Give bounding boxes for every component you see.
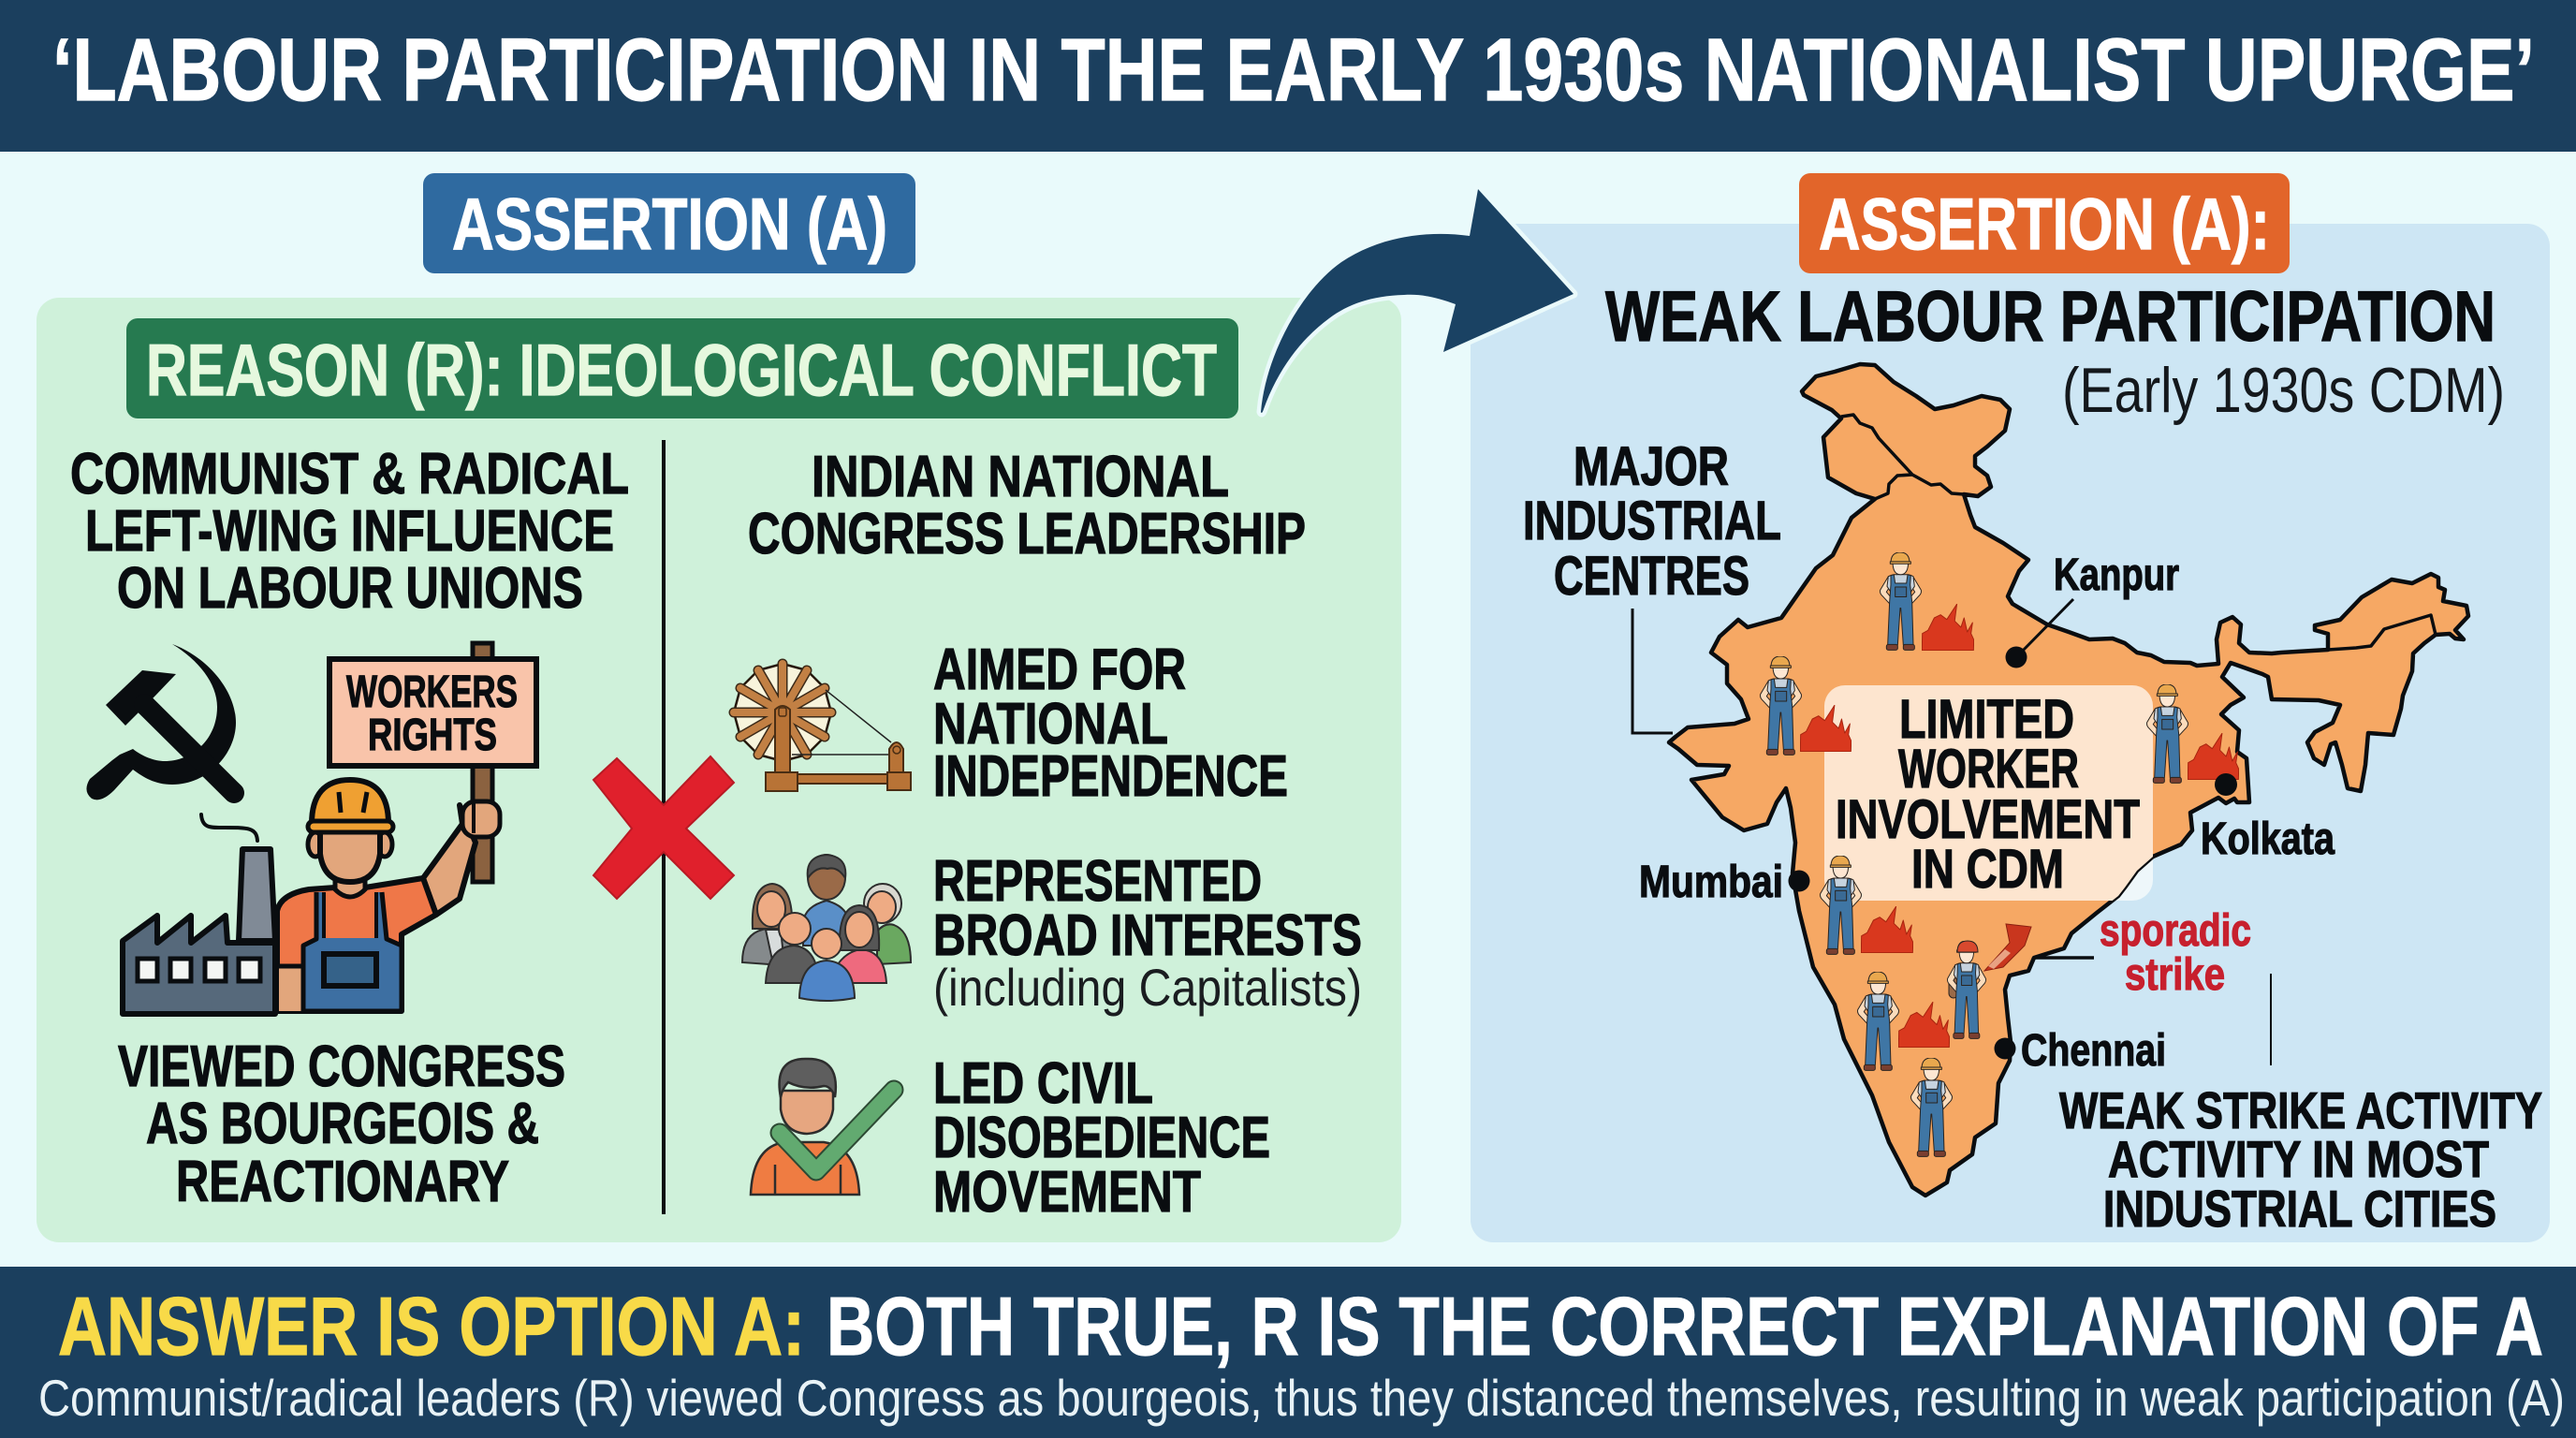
- city: Kolkata: [2201, 773, 2334, 864]
- callout box: limited worker involvement: IN CDM: [1911, 839, 2064, 900]
- text: aimed for national independence: AIMED FOR: [933, 638, 1186, 702]
- text: led civil disobedience: LED CIVIL: [933, 1051, 1153, 1116]
- text: viewed congress: AS BOURGEOIS &: [146, 1092, 539, 1156]
- text: led civil disobedience: MOVEMENT: [933, 1160, 1201, 1225]
- striking worker with flag: [1947, 924, 2031, 1038]
- text: communist influence heading: LEFT-WING INFLUENCE: [85, 499, 614, 564]
- callout glow outside coast: [1824, 685, 2153, 901]
- label: major industrial centres: CENTRES: [1554, 546, 1749, 607]
- callout box: limited worker involvement: INVOLVEMENT: [1836, 789, 2140, 850]
- badge: assertion left: [423, 173, 915, 273]
- text: aimed for national independence: NATIONAL: [933, 692, 1168, 756]
- callout box: limited worker involvement: [1824, 685, 2153, 901]
- text: represented broad interests: REPRESENTED: [933, 849, 1262, 914]
- icon: hammer and sickle: [86, 644, 236, 800]
- callout box: limited worker involvement: WORKER: [1898, 739, 2079, 800]
- icon: leader with check mark: [751, 1059, 894, 1195]
- text: viewed congress: VIEWED CONGRESS: [118, 1034, 565, 1099]
- footer banner: answer: ANSWER IS OPTION A:: [58, 1280, 805, 1372]
- badge: assertion right: ASSERTION (A):: [1819, 183, 2270, 265]
- icon: worker with sign: [277, 643, 500, 1011]
- sign: workers rights: RIGHTS: [368, 711, 497, 760]
- text: communist influence heading: COMMUNIST & RADICAL: [70, 442, 629, 506]
- badge: assertion left: ASSERTION (A): [452, 183, 887, 265]
- sign: workers rights: WORKERS: [346, 668, 518, 717]
- sign: workers rights: [329, 659, 536, 766]
- workers and flames on map: [1761, 552, 2239, 1156]
- map of India: [1669, 364, 2468, 1196]
- text: led civil disobedience: [933, 1051, 1270, 1225]
- connector: weak strike: [2270, 974, 2272, 1065]
- heading: weak labour participation: [1605, 277, 2505, 426]
- label: weak strike activity: [2059, 1081, 2542, 1238]
- icon: charkha spinning wheel: [734, 664, 911, 791]
- label: major industrial centres: INDUSTRIAL: [1523, 491, 1781, 551]
- text: aimed for national independence: INDEPENDENCE: [933, 744, 1288, 809]
- panel: reason (green): [37, 298, 1401, 1242]
- text: represented broad interests: (including Capitalists): [933, 958, 1362, 1017]
- label: sporadic strike: sporadic: [2100, 906, 2251, 956]
- city: Kolkata: Kolkata: [2201, 814, 2334, 864]
- text: communist influence heading: [70, 442, 629, 621]
- text: congress heading: CONGRESS LEADERSHIP: [748, 502, 1306, 566]
- text: aimed for national independence: [933, 638, 1288, 809]
- panel: assertion map (blue): [1471, 224, 2550, 1242]
- icon: red cross: [593, 756, 734, 899]
- title banner: [0, 0, 2576, 152]
- text: viewed congress: REACTIONARY: [176, 1150, 509, 1214]
- icon: factory: [123, 814, 275, 1014]
- label: sporadic strike: strike: [2125, 950, 2225, 1000]
- text: viewed congress: [118, 1034, 565, 1214]
- city: Kanpur: Kanpur: [2054, 550, 2179, 600]
- footer banner: answer: [0, 1267, 2576, 1438]
- heading: reason: [126, 318, 1238, 418]
- text: congress heading: INDIAN NATIONAL: [812, 445, 1229, 509]
- city: Chennai: Chennai: [2021, 1026, 2166, 1076]
- heading: reason: REASON (R): IDEOLOGICAL CONFLICT: [146, 329, 1217, 411]
- city: Mumbai: Mumbai: [1639, 858, 1783, 907]
- text: communist influence heading: ON LABOUR UNIONS: [117, 556, 583, 621]
- label: weak strike activity: ACTIVITY IN MOST: [2108, 1130, 2489, 1188]
- label: major industrial centres: MAJOR: [1573, 436, 1729, 497]
- divider: [662, 440, 666, 1214]
- text: congress heading: [748, 445, 1306, 566]
- arrow: from reason to assertion: [1261, 189, 1573, 413]
- callout box: limited worker involvement: LIMITED: [1899, 689, 2074, 750]
- city: Kanpur: [2005, 550, 2179, 668]
- label: sporadic strike: [2034, 906, 2251, 1000]
- text: represented broad interests: BROAD INTERESTS: [933, 903, 1362, 968]
- label: major industrial centres: [1523, 436, 1781, 607]
- icon: group of people: [742, 855, 911, 1001]
- badge: assertion right: [1799, 173, 2290, 273]
- text: represented broad interests: [933, 849, 1362, 1017]
- connector: industrial centres: [1632, 609, 1673, 733]
- text: led civil disobedience: DISOBEDIENCE: [933, 1106, 1270, 1170]
